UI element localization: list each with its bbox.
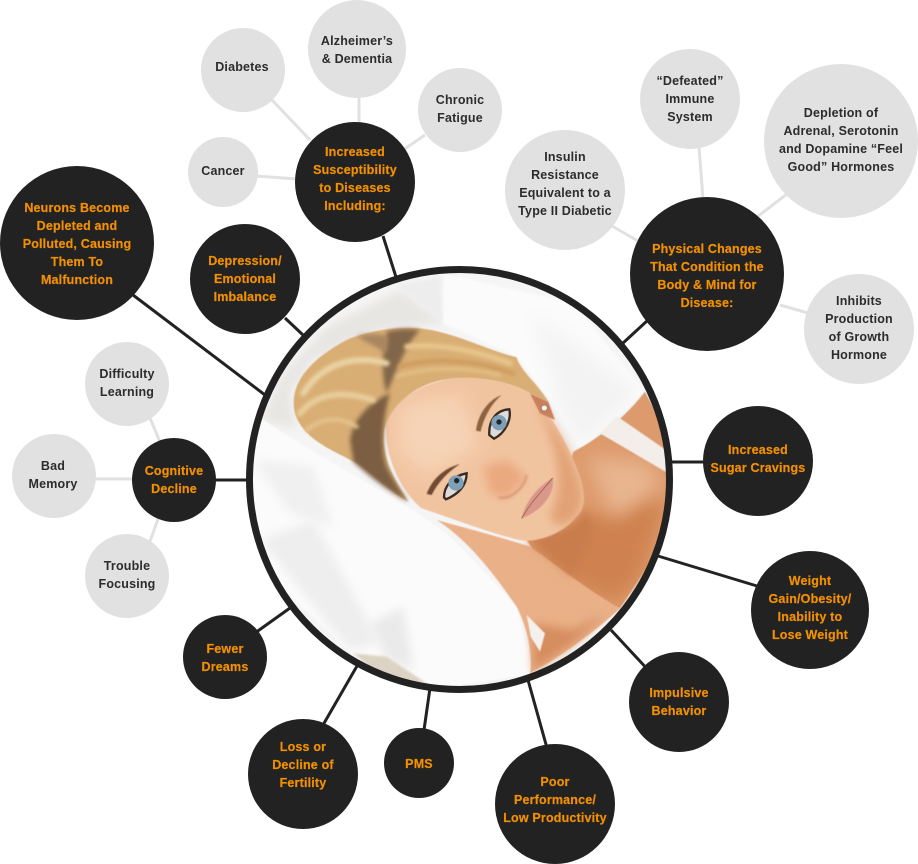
sub-node: Alzheimer's <box>308 0 406 98</box>
sub-node: Cancer <box>188 137 258 207</box>
node: Depression: Imbalance <box>214 290 276 304</box>
shoulder and chest <box>527 392 673 608</box>
node: Poor Performance: Performance/ <box>514 793 596 807</box>
node: Increased Susceptibility: to Diseases <box>319 181 391 195</box>
node: Cognitive Decline: Cognitive <box>145 464 203 478</box>
sub-node: Trouble Focusing: Focusing <box>98 577 156 591</box>
sub-node: Depletion of Hormones: Adrenal, Serotonin <box>783 124 899 138</box>
node: Weight Gain: Gain/Obesity/ <box>769 592 852 606</box>
node: Neurons: Malfunction <box>41 273 113 287</box>
node: Sugar Cravings: Sugar Cravings <box>711 461 805 475</box>
node: PMS <box>384 728 454 798</box>
sub-node: Bad Memory: Bad <box>41 459 65 473</box>
nose <box>498 475 527 498</box>
node: Impulsive Behavior: Behavior <box>652 704 706 718</box>
sub-node: Alzheimer's: Alzheimer’s <box>321 34 393 48</box>
lips <box>522 478 553 518</box>
sub-node: Insulin Resistance: Equivalent to a <box>519 186 612 200</box>
sub-node: Defeated Immune System: “Defeated” <box>656 74 724 88</box>
sub-node: Bad Memory: Memory <box>28 477 78 491</box>
sub-node: Insulin Resistance: Insulin <box>544 150 586 164</box>
arm under head <box>437 520 620 673</box>
sub-node: Chronic Fatigue: Fatigue <box>437 111 483 125</box>
strap <box>600 416 666 472</box>
node: Neurons: Neurons Become <box>24 201 130 215</box>
sub-node: Growth Hormone <box>804 274 914 384</box>
node: Increased Susceptibility <box>295 122 415 242</box>
node: Increased Susceptibility: Including: <box>324 199 386 213</box>
photo ring <box>250 270 670 690</box>
node: Loss of Fertility: Loss or <box>280 740 326 754</box>
sub-node: Growth Hormone: Inhibits <box>836 294 882 308</box>
sub-node: Chronic Fatigue <box>418 68 502 152</box>
sub-node: Depletion of Hormones: Depletion of <box>804 106 879 120</box>
sub-node: Difficulty Learning <box>85 342 169 426</box>
sub-node: Chronic Fatigue: Chronic <box>436 93 484 107</box>
sub-node: Defeated Immune System: System <box>667 110 713 124</box>
node: Sugar Cravings <box>703 406 813 516</box>
node: Cognitive Decline <box>132 438 216 522</box>
sub-node: Diabetes <box>201 28 285 112</box>
node: Weight Gain: Lose Weight <box>772 628 849 642</box>
ear and earring <box>530 393 555 420</box>
node: Depression: Emotional <box>214 272 276 286</box>
sub-node: Growth Hormone: of Growth <box>829 330 889 344</box>
sub-node: Insulin Resistance <box>505 130 625 250</box>
sub-node: Difficulty Learning: Learning <box>100 385 154 399</box>
sub-node: Difficulty Learning: Difficulty <box>99 367 155 381</box>
node: Depression <box>190 224 300 334</box>
node: Fewer Dreams: Fewer <box>206 642 244 656</box>
node: Neurons: Depleted and <box>37 219 117 233</box>
sub-node: Defeated Immune System: Immune <box>665 92 715 106</box>
node: Poor Performance <box>495 744 615 864</box>
node: Loss of Fertility: Fertility <box>280 776 326 790</box>
node: Increased Susceptibility: Increased <box>325 145 385 159</box>
node: Depression: Depression/ <box>208 254 282 268</box>
node: Poor Performance: Low Productivity <box>503 811 607 825</box>
node: Sugar Cravings: Increased <box>728 443 788 457</box>
node: Poor Performance: Poor <box>540 775 570 789</box>
node: Neurons: Them To <box>51 255 103 269</box>
sub-node: Bad Memory <box>12 434 96 518</box>
sub-node: Insulin Resistance: Type II Diabetic <box>518 204 612 218</box>
upper eye <box>489 409 510 439</box>
connector lines: grey sub-topic links <box>94 98 808 547</box>
brows <box>476 395 502 432</box>
node: Weight Gain: Inability to <box>778 610 843 624</box>
sub-node: Trouble Focusing: Trouble <box>104 559 150 573</box>
central photo: woman lying awake on a pillow <box>240 260 680 700</box>
back pillow shading <box>260 290 447 430</box>
node: Loss of Fertility <box>248 719 358 829</box>
node: Weight Gain: Weight <box>789 574 832 588</box>
sub-node: Defeated Immune System <box>640 49 740 149</box>
sub-node: Diabetes: Diabetes <box>215 60 269 74</box>
node: Neurons: Polluted, Causing <box>23 237 131 251</box>
sub-node: Growth Hormone: Hormone <box>831 348 887 362</box>
sub-node: Depletion of Hormones: and Dopamine “Feel <box>779 142 903 156</box>
node: Physical Changes: Body & Mind for <box>657 278 757 292</box>
node: Cognitive Decline: Decline <box>151 482 197 496</box>
lower eye <box>444 473 467 499</box>
front pillow <box>261 419 278 430</box>
neck shadow <box>527 507 597 577</box>
connector lines: dark spokes to main photo <box>133 236 757 748</box>
hair <box>294 328 548 502</box>
sub-node: Depletion of Hormones <box>764 64 918 218</box>
sub-node: Trouble Focusing <box>85 534 169 618</box>
node: Physical Changes <box>630 197 784 351</box>
node: Physical Changes: Disease: <box>681 296 733 310</box>
node: Impulsive Behavior: Impulsive <box>649 686 709 700</box>
node: Physical Changes: That Condition the <box>650 260 764 274</box>
node: Impulsive Behavior <box>629 652 729 752</box>
node: Physical Changes: Physical Changes <box>652 242 762 256</box>
node: PMS: PMS <box>405 757 433 771</box>
sub-node: Depletion of Hormones: Good” Hormones <box>788 160 894 174</box>
sub-node: Alzheimer's: & Dementia <box>322 52 393 66</box>
node: Loss of Fertility: Decline of <box>272 758 334 772</box>
sub-node: Cancer: Cancer <box>201 164 245 178</box>
node: Weight Gain <box>751 551 869 669</box>
node: Fewer Dreams <box>183 615 267 699</box>
face <box>386 378 584 541</box>
node: Fewer Dreams: Dreams <box>202 660 248 674</box>
sub-node: Growth Hormone: Production <box>825 312 893 326</box>
node: Neurons <box>0 166 154 320</box>
node: Increased Susceptibility: Susceptibility <box>313 163 397 177</box>
sub-node: Insulin Resistance: Resistance <box>531 168 599 182</box>
